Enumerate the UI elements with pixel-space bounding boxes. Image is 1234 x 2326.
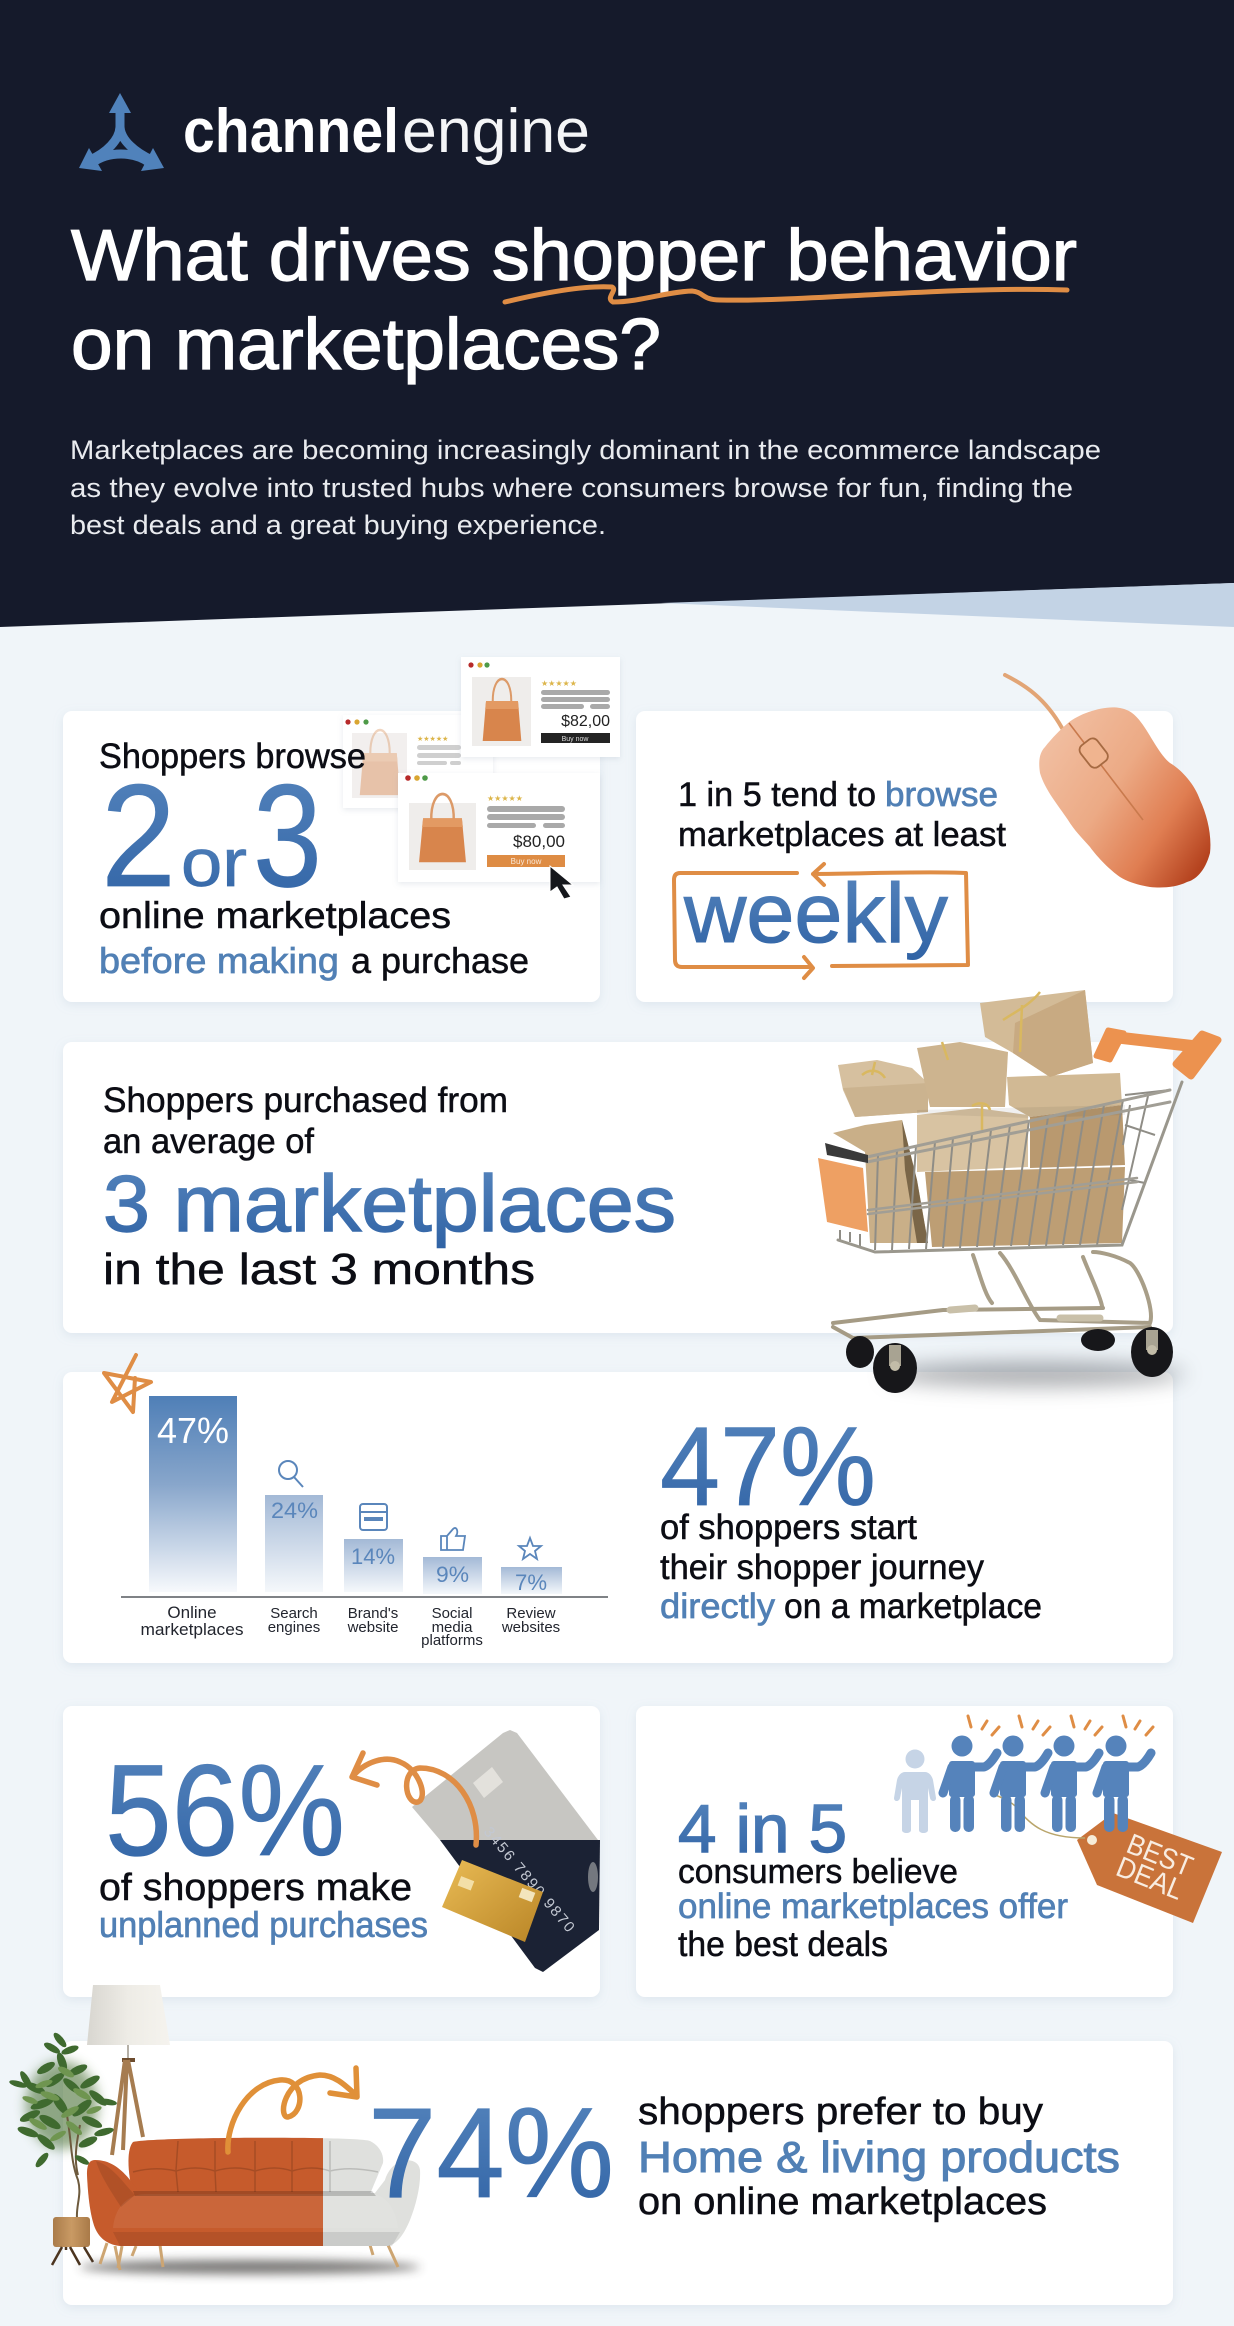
product card: top $82,00: ★★★★★ (541, 679, 577, 688)
person 1 (943, 1736, 997, 1832)
panel: browse 2 or 3 marketplaces (63, 657, 620, 1002)
text: shoppers purchased from: Shoppers purchased from (103, 1081, 508, 1120)
title (71, 216, 1077, 385)
text: unplanned purchases: unplanned purchases (99, 1904, 428, 1945)
bar: search engines 24% (265, 1495, 323, 1592)
illustration: floor lamp (87, 1985, 170, 2155)
product card: front $80,00: ★★★★★ (487, 794, 523, 803)
tag text: BEST (1122, 1828, 1197, 1884)
product card: front $80,00: $80,00 (513, 832, 565, 851)
bar: review websites 7% (501, 1567, 562, 1595)
text: online marketplaces: online marketplaces (99, 895, 451, 936)
product card: top $82,00: Buy now (562, 736, 589, 743)
text: on online marketplaces: on online marketplaces (638, 2181, 1047, 2223)
text: an average of: an average of (103, 1122, 314, 1161)
icon: hand-drawn orange star (104, 1355, 151, 1412)
product card: front $80,00 (398, 773, 600, 882)
stat: 74%: 74% (368, 2082, 614, 2225)
cart wheels (846, 1327, 1173, 1393)
axis labels: Review (506, 1605, 556, 1622)
panel: best deals (636, 1706, 1173, 1997)
axis labels: media (432, 1619, 473, 1636)
panel: unplanned purchases (63, 1706, 600, 1997)
text: home and living products: Home & living products (638, 2133, 1120, 2182)
icons: four raised-hand people (943, 1736, 1151, 1832)
bar: review websites 7%: 7% (515, 1570, 547, 1595)
basket wires (840, 1090, 1170, 1250)
person 4 (1097, 1736, 1151, 1832)
icon: thumbs up (441, 1528, 465, 1550)
bar: social media 9%: 9% (436, 1562, 469, 1587)
text: 1 in 5 tend to browse: browse (885, 776, 998, 814)
parcels (833, 990, 1125, 1247)
axis labels: website (347, 1619, 398, 1636)
product card: top $82,00: $82,00 (561, 713, 610, 730)
axis labels: Search (270, 1605, 318, 1622)
text: before making a purchase (99, 940, 529, 981)
text: directly on a marketplace: on a marketplace (784, 1587, 1042, 1626)
pot (53, 2217, 90, 2247)
sofa uncoloured half (87, 2138, 420, 2246)
cart handle (1096, 1030, 1218, 1076)
illustration: computer mouse (1005, 675, 1210, 887)
panel: home and living (63, 2041, 1173, 2305)
logo (79, 93, 399, 171)
product card: top $82,00 (461, 657, 620, 757)
text: before making a purchase: a purchase (351, 940, 529, 981)
big text: 3 marketplaces: 3 marketplaces (103, 1159, 676, 1248)
bar: social media 9% (423, 1557, 482, 1594)
icon: cursor (550, 866, 573, 899)
arrow (352, 1753, 476, 1845)
big number: 2 or 3: or (181, 825, 247, 901)
big number: 2 or 3 (101, 754, 322, 917)
logo wordmark light part: engine (402, 97, 590, 166)
cart child seat panel (818, 1158, 868, 1232)
intro text (70, 435, 1101, 540)
arrow frame (674, 864, 968, 978)
sofa legs (100, 2243, 398, 2270)
icon: search (279, 1461, 303, 1487)
tag string (990, 1793, 1085, 1838)
header background (0, 0, 1234, 640)
cart frame (833, 1082, 1182, 1338)
bar: online marketplaces 47% (149, 1396, 237, 1592)
big number: 2 or 3: 3 (253, 754, 322, 917)
text: the best deals: the best deals (678, 1925, 888, 1964)
text: shoppers prefer to buy: shoppers prefer to buy (638, 2091, 1043, 2133)
illustration: credit cards (412, 1730, 600, 1972)
price tag: best deal (1077, 1813, 1222, 1923)
text: in the last 3 months: in the last 3 months (103, 1245, 535, 1294)
icon: faded person (894, 1750, 936, 1833)
panel: weekly (636, 711, 1173, 1002)
illustration: sofa (80, 2138, 420, 2274)
parcel twine (862, 992, 1040, 1130)
axis labels: marketplaces (140, 1620, 244, 1639)
illustration: potted plant (9, 2031, 117, 2265)
icon: outline star (519, 1538, 541, 1559)
axis labels: websites (501, 1619, 560, 1636)
text: online marketplaces offer: online marketplaces offer (678, 1887, 1068, 1926)
illustration: shopping cart (818, 990, 1218, 1393)
bar chart (121, 1396, 608, 1649)
product card: faded middle: ★★★★★ (417, 735, 448, 743)
word: weekly: weekly (683, 866, 948, 960)
text: directly on a marketplace: directly (660, 1587, 776, 1626)
text: shoppers browse: Shoppers browse (99, 737, 366, 776)
tag text (1112, 1828, 1197, 1907)
big number: 2 or 3: 2 (101, 754, 176, 917)
person 2 (994, 1736, 1048, 1832)
panel: 3 marketplaces (63, 1042, 1173, 1333)
axis labels: Online (167, 1603, 217, 1622)
logo wordmark: channel (183, 97, 399, 166)
title: What drives shopper behavior (71, 216, 1077, 296)
bar: search engines 24%: 24% (271, 1498, 318, 1523)
bar: brand's website 14% (344, 1539, 403, 1592)
person 3 (1045, 1736, 1099, 1832)
text: directly on a marketplace (660, 1587, 1042, 1626)
text: before making a purchase: before making (99, 940, 339, 981)
cart legs and base (973, 1252, 1151, 1323)
text: 1 in 5 tend to browse (678, 776, 998, 814)
intro text: Marketplaces are becoming increasingly dominant in the ecommerce landscape (70, 435, 1101, 465)
icon: channelengine logo mark (79, 93, 164, 171)
bar: brand's website 14%: 14% (351, 1544, 395, 1569)
stat: 56%: 56% (105, 1737, 345, 1883)
axis labels: engines (268, 1619, 320, 1636)
stat: 47%: 47% (660, 1404, 876, 1529)
axis labels: Social (432, 1605, 472, 1622)
illustration: credit cards: 3456 7890 9870 (480, 1824, 578, 1936)
product card: front $80,00: Buy now (511, 857, 542, 866)
text: their shopper journey: their shopper journey (660, 1548, 984, 1587)
text: of shoppers start: of shoppers start (660, 1508, 917, 1547)
axis labels: platforms (421, 1632, 483, 1649)
title: on marketplaces? (71, 305, 661, 385)
text: of shoppers make: of shoppers make (99, 1867, 412, 1909)
stat: 4 in 5: 4 in 5 (678, 1791, 847, 1867)
text: 1 in 5 tend to browse: 1 in 5 tend to (678, 776, 876, 814)
sofa coloured half (86, 2138, 323, 2246)
arrow (228, 2068, 357, 2152)
intro text: as they evolve into trusted hubs where consumers browse for fun, finding the (70, 473, 1073, 503)
intro text: best deals and a great buying experience. (70, 510, 606, 540)
panel: start of shopper journey (63, 1355, 1173, 1663)
title underline squiggle (505, 287, 1067, 302)
axis labels: Brand's (348, 1605, 398, 1622)
product card: faded middle (343, 715, 493, 808)
bar: online marketplaces 47%: 47% (157, 1410, 229, 1451)
text: marketplaces at least: marketplaces at least (678, 816, 1007, 854)
icon: browser window (360, 1504, 387, 1530)
tag text: DEAL (1112, 1851, 1188, 1907)
excitement rays (968, 1716, 1153, 1735)
text: consumers believe: consumers believe (678, 1853, 958, 1891)
axis labels (140, 1603, 560, 1649)
